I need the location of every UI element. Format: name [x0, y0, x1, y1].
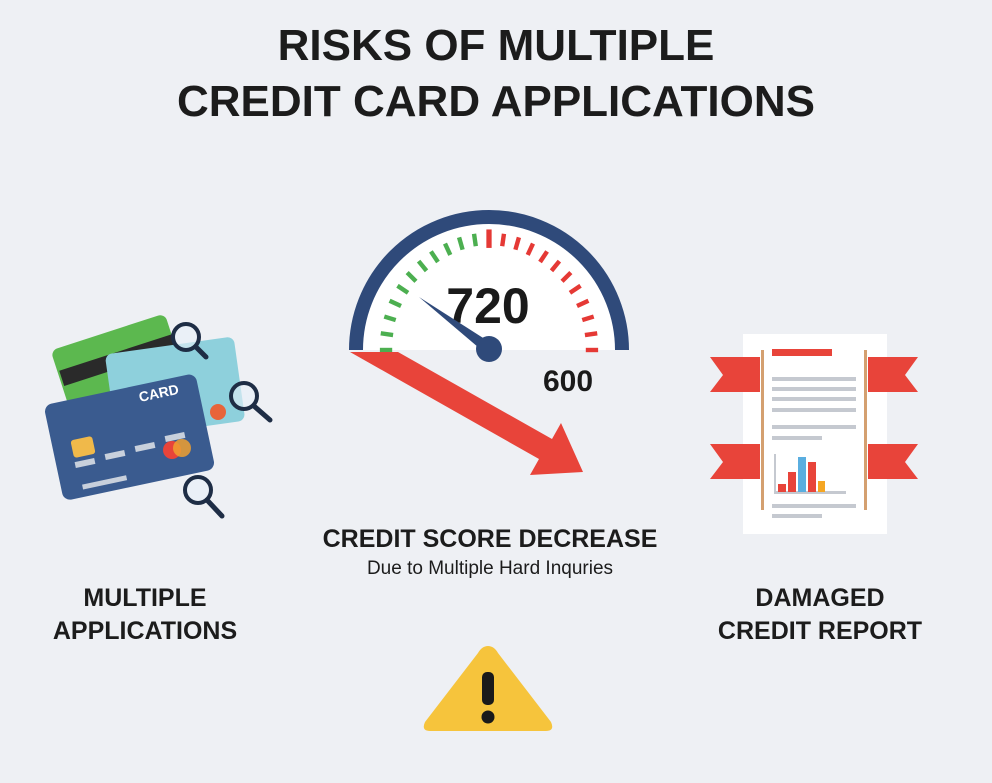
title: CREDIT CARD APPLICATIONS: [177, 77, 815, 126]
icon: warning: [424, 646, 552, 731]
text: damaged credit report: DAMAGED: [755, 584, 885, 612]
text: credit score decrease: CREDIT SCORE DECREASE: [323, 525, 657, 553]
text: multiple applications: [53, 584, 237, 645]
score 720: 720: [446, 278, 530, 334]
text: multiple applications: MULTIPLE: [83, 584, 207, 612]
icon: credit cards: [44, 313, 270, 516]
title: [177, 21, 815, 126]
icon: damaged credit report: [710, 334, 918, 534]
text: damaged credit report: [718, 584, 922, 645]
title: RISKS OF MULTIPLE: [278, 21, 714, 70]
text: multiple applications: APPLICATIONS: [53, 617, 237, 645]
needle: [419, 297, 491, 353]
text: damaged credit report: CREDIT REPORT: [718, 617, 922, 645]
icon: credit cards: CARD: [137, 381, 180, 405]
score 600: 600: [543, 365, 593, 398]
gauge: [356, 217, 622, 362]
text: subtitle: Due to Multiple Hard Inquries: [367, 558, 613, 579]
arrow: decrease: [350, 352, 583, 475]
